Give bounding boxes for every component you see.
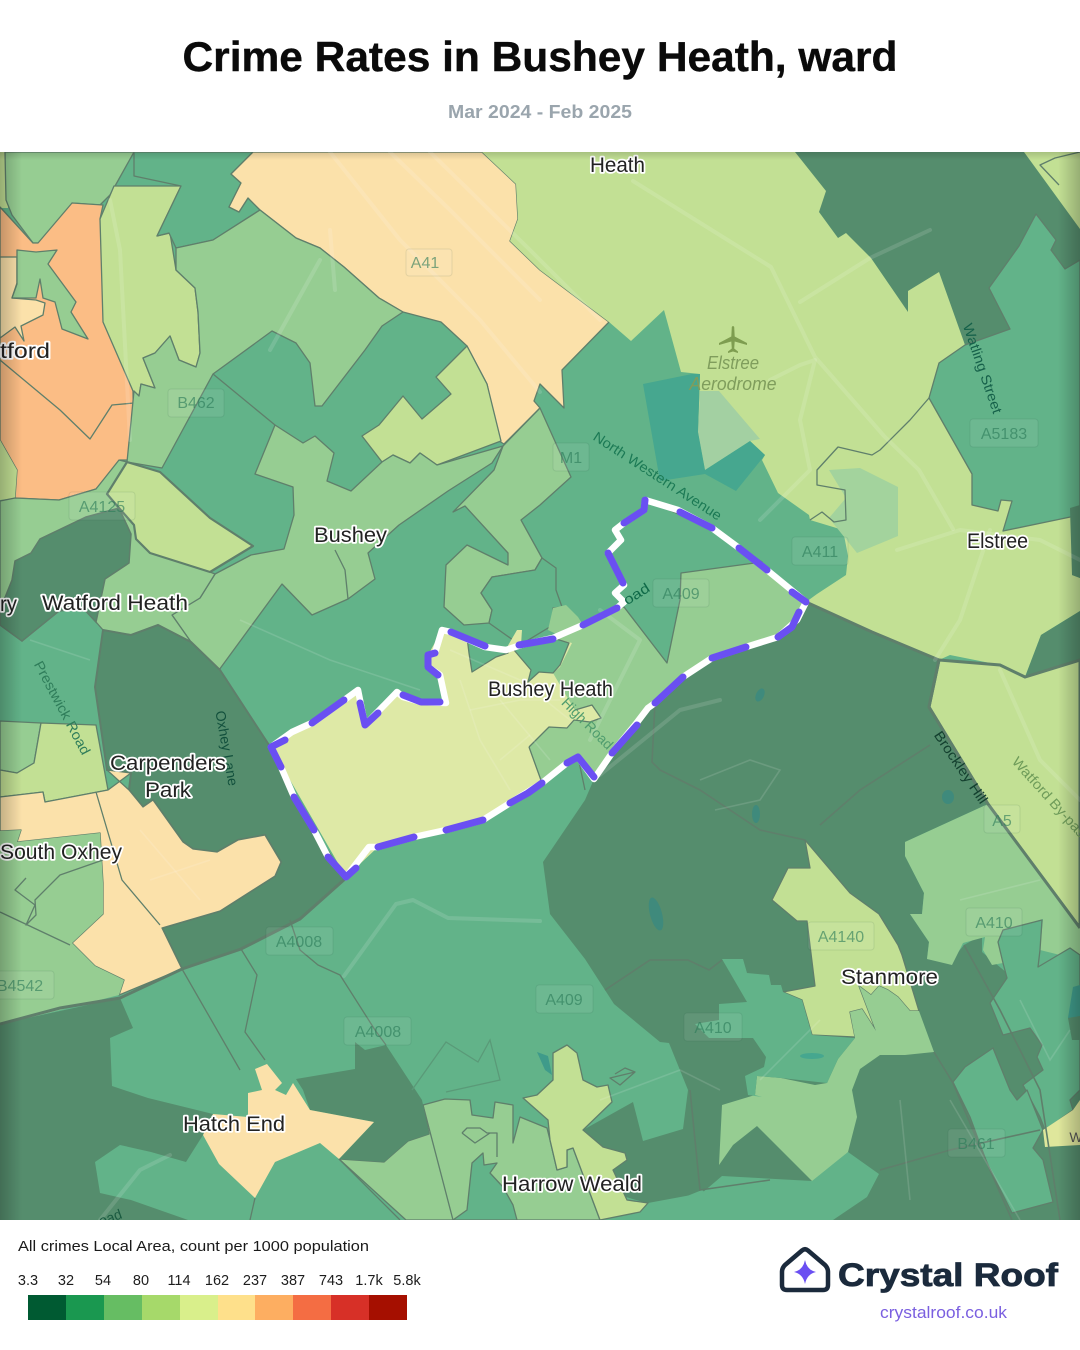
brand logo: Crystal Roof xyxy=(782,1249,1058,1322)
legend values: 1.7k xyxy=(355,1273,383,1289)
legend values: 387 xyxy=(281,1273,305,1289)
place names: South Oxhey xyxy=(0,841,123,864)
street name labels: oad xyxy=(97,1206,124,1229)
legend values: 32 xyxy=(58,1273,74,1289)
street name labels: Brockley Hill xyxy=(931,728,991,806)
ward interior regions xyxy=(271,500,806,877)
legend values: 54 xyxy=(95,1273,111,1289)
airport label: Elstree Aerodrome: Elstree xyxy=(707,353,759,373)
street name labels: North Western Avenue xyxy=(590,428,725,523)
road number labels: A5 xyxy=(992,813,1012,830)
street name labels: Oxhey Lane xyxy=(212,709,241,787)
legend colour scale xyxy=(28,1295,407,1320)
title: Crime Rates in Bushey Heath, ward xyxy=(182,33,898,80)
place names xyxy=(0,154,1028,1196)
ponds xyxy=(646,687,954,1059)
airport label: Elstree Aerodrome: Aerodrome xyxy=(689,374,776,394)
road number labels: B461 xyxy=(957,1136,995,1153)
legend values: 80 xyxy=(133,1273,149,1289)
legend title: All crimes Local Area, count per 1000 population xyxy=(18,1239,369,1255)
airport label: Elstree Aerodrome xyxy=(688,356,776,390)
place names: Bushey Heath xyxy=(488,678,613,701)
choropleth map panel xyxy=(0,152,1080,1229)
street name labels xyxy=(31,321,1080,1229)
map regions xyxy=(0,152,1080,1220)
website: crystalroof.co.uk xyxy=(880,1304,1008,1322)
road number labels: A4125 xyxy=(79,499,125,516)
legend values: 5.8k xyxy=(393,1273,421,1289)
road number labels: A41 xyxy=(411,255,439,272)
road number labels: A5183 xyxy=(981,426,1027,443)
road number labels: A4008 xyxy=(276,934,322,951)
place names: Elstree xyxy=(967,530,1028,553)
street name labels: High Road xyxy=(559,694,617,752)
place names: Hatch End xyxy=(183,1113,285,1136)
road number labels: B462 xyxy=(177,395,215,412)
legend values: 237 xyxy=(243,1273,267,1289)
icon: house with star xyxy=(782,1249,828,1290)
roads and street network xyxy=(30,152,1080,1220)
place names: Stanmore xyxy=(841,966,938,989)
place names: ry xyxy=(0,593,17,616)
legend values: 3.3 xyxy=(18,1273,38,1289)
road number labels: A410 xyxy=(694,1020,732,1037)
road number labels: A4008 xyxy=(355,1024,401,1041)
street name labels: Watling Street xyxy=(960,321,1006,416)
place names: Harrow Weald xyxy=(502,1173,642,1196)
icon: airport plane xyxy=(719,326,747,353)
place names: Bushey xyxy=(314,524,388,547)
place names: Park xyxy=(145,779,192,802)
street name labels: oad xyxy=(620,580,652,608)
place names: tford xyxy=(0,340,50,363)
road number labels: A410 xyxy=(975,915,1013,932)
place names: Watford Heath xyxy=(42,592,188,615)
road number labels: M1 xyxy=(560,450,582,467)
street name labels: Prestwick Road xyxy=(31,658,94,757)
legend values: 162 xyxy=(205,1273,229,1289)
legend values xyxy=(18,1273,421,1289)
place names: Carpenders xyxy=(110,752,226,775)
ward boundary: Bushey Heath xyxy=(271,500,806,877)
road number labels: A4140 xyxy=(818,929,864,946)
subtitle: date range: Mar 2024 - Feb 2025 xyxy=(448,102,632,122)
road number labels xyxy=(0,249,1038,1157)
place names: Heath xyxy=(590,154,645,177)
road number labels: A411 xyxy=(802,544,838,561)
legend xyxy=(18,1239,421,1320)
legend values: 114 xyxy=(167,1273,191,1289)
legend values: 743 xyxy=(319,1273,343,1289)
road number labels: A409 xyxy=(662,586,700,603)
road number labels: A409 xyxy=(545,992,583,1009)
wordmark: Crystal Roof xyxy=(838,1257,1058,1293)
